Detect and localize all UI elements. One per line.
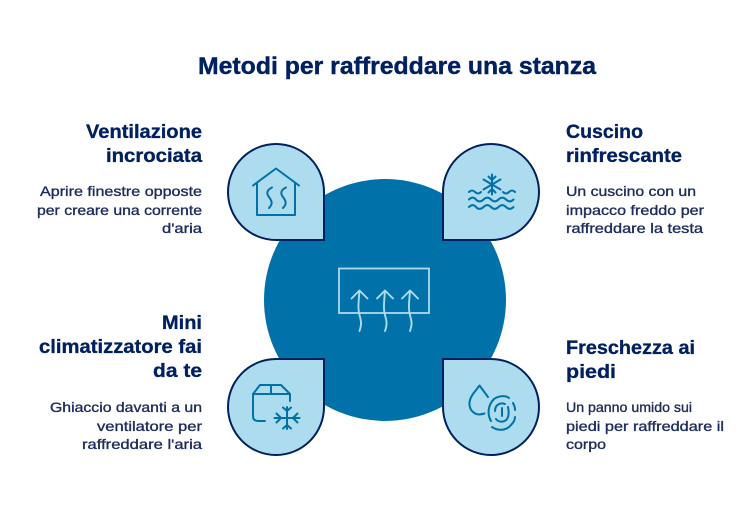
description: d'aria xyxy=(162,220,202,236)
heading xyxy=(39,313,202,382)
description: Un cuscino con un xyxy=(566,183,696,199)
icon: house with air currents xyxy=(253,168,299,215)
description: raffreddare l'aria xyxy=(82,436,202,452)
icon: heat rising through a window xyxy=(339,268,429,331)
heading: Mini xyxy=(162,313,202,334)
heading: rinfrescante xyxy=(566,146,682,167)
heading xyxy=(566,338,695,383)
description: Aprire finestre opposte xyxy=(40,183,202,199)
central circle xyxy=(264,179,506,421)
description xyxy=(566,399,724,452)
heading: climatizzatore fai xyxy=(39,337,202,358)
panel: ventilazione incrociata xyxy=(37,122,324,240)
heading xyxy=(86,122,202,167)
petal top right xyxy=(443,144,539,240)
description xyxy=(37,183,202,236)
description: per creare una corrente xyxy=(37,202,202,218)
icon: water drop and fingerprint xyxy=(469,386,515,430)
description: raffreddare la testa xyxy=(566,220,703,236)
description: ventilatore per xyxy=(97,418,202,434)
description: Un panno umido sui xyxy=(566,399,692,415)
heading xyxy=(566,122,682,167)
description xyxy=(50,399,202,452)
description xyxy=(566,183,704,236)
heading: incrociata xyxy=(106,146,202,167)
petal bottom right xyxy=(443,359,539,455)
heading: piedi xyxy=(566,362,616,383)
panel: mini climatizzatore fai da te xyxy=(39,313,324,455)
title: Metodi per raffreddare una stanza xyxy=(198,53,597,80)
description: Ghiaccio davanti a un xyxy=(50,399,202,415)
petal top left xyxy=(228,144,324,240)
icon: snowflake over waves xyxy=(469,174,515,209)
petal bottom left xyxy=(228,359,324,455)
description: piedi per raffreddare il xyxy=(566,418,724,434)
icon: box with snowflake xyxy=(253,385,300,429)
description: impacco freddo per xyxy=(566,202,704,218)
description: corpo xyxy=(566,436,606,452)
panel: freschezza ai piedi xyxy=(443,338,724,455)
heading: Freschezza ai xyxy=(566,338,695,359)
heading: da te xyxy=(153,361,202,382)
heading: Cuscino xyxy=(566,122,643,143)
panel: cuscino rinfrescante xyxy=(443,122,704,240)
heading: Ventilazione xyxy=(86,122,202,143)
